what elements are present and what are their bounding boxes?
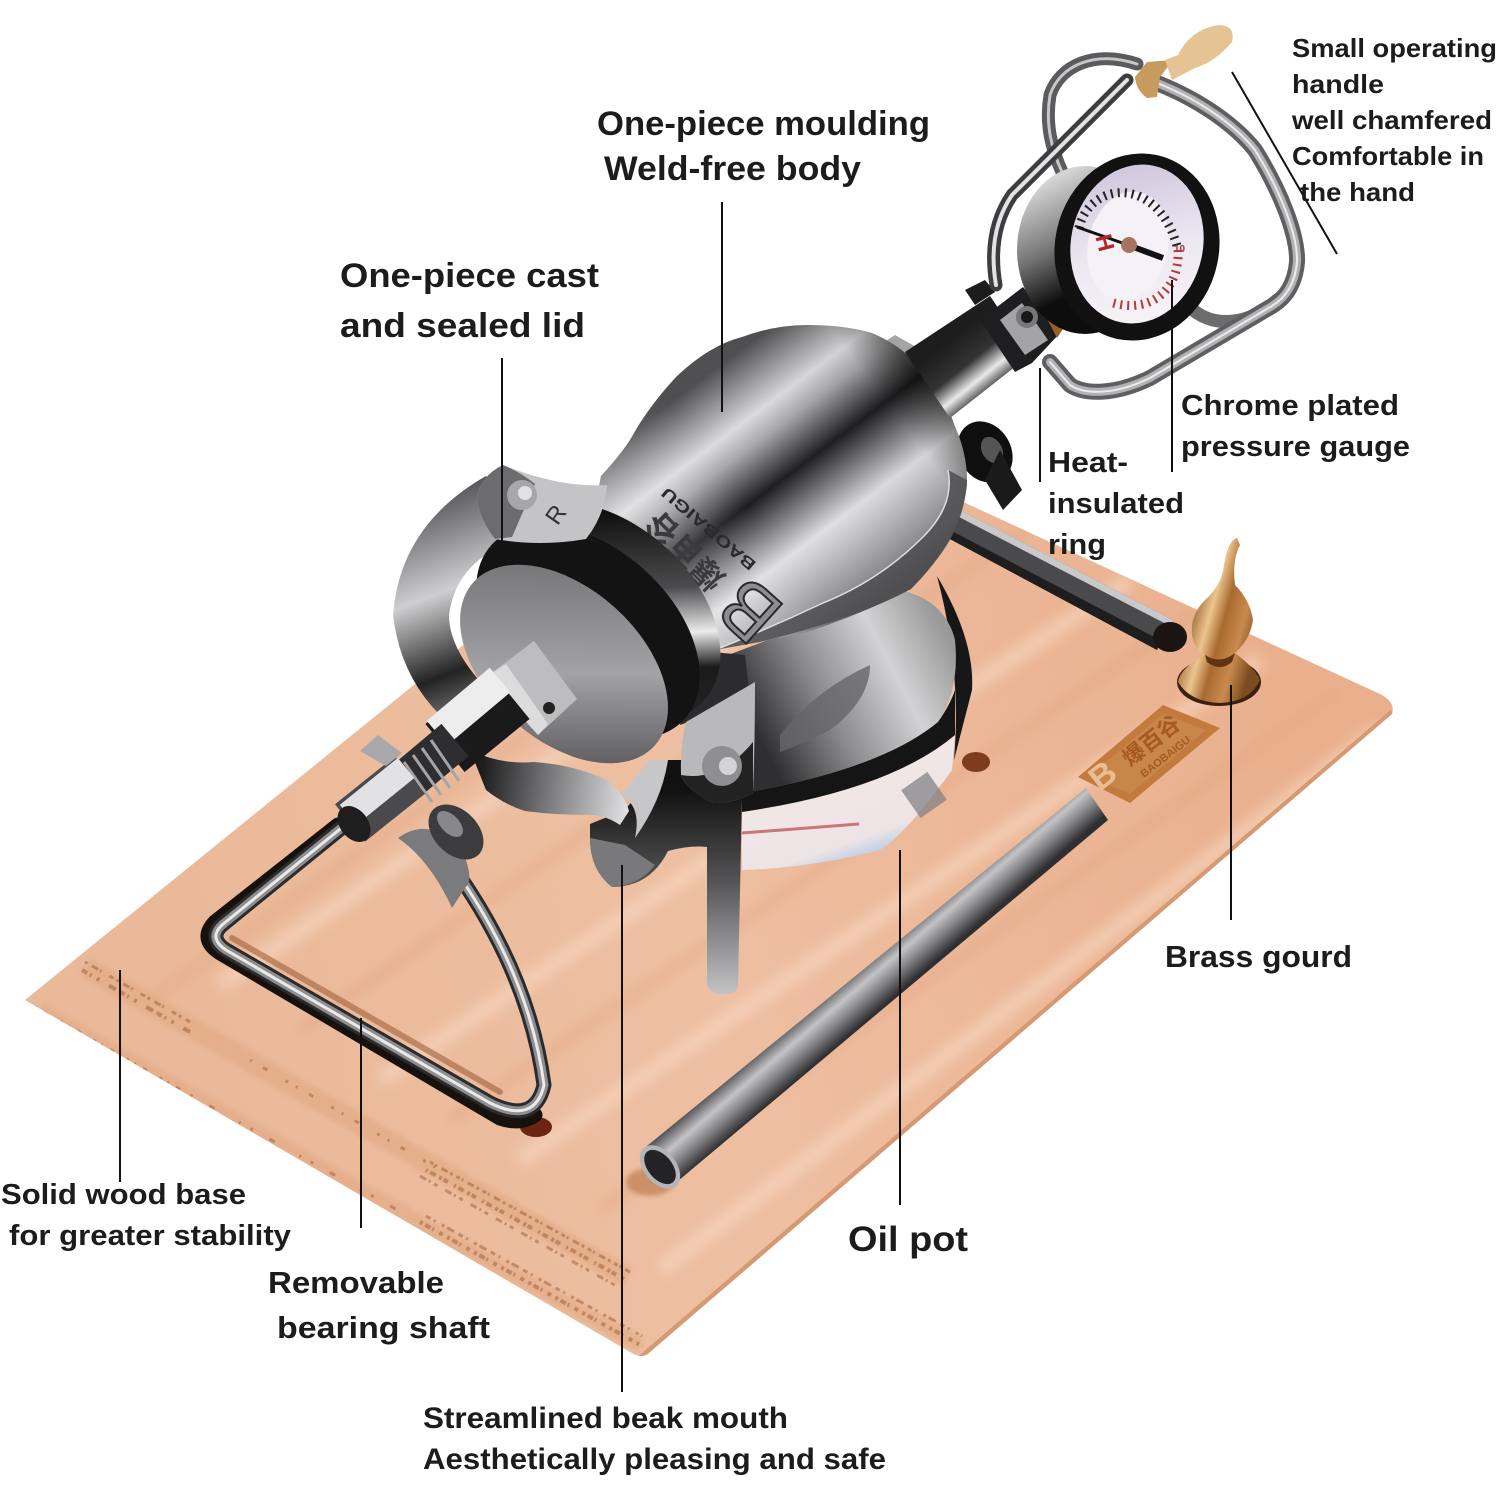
bearing boss <box>486 641 577 735</box>
label: cast lid <box>340 257 599 345</box>
gauge needle <box>1077 227 1163 258</box>
label: operating handle: the hand <box>1300 177 1415 207</box>
wooden base board <box>25 502 1393 1356</box>
label: removable bearing shaft: Removable <box>268 1265 444 1300</box>
icon: logo plate: 爆百谷 <box>1118 711 1185 771</box>
icon: oil pot <box>715 576 972 870</box>
icon: rear stand leg <box>946 411 1187 772</box>
icon: lower beak and leg <box>590 760 742 994</box>
embossed brand on body: B <box>701 561 798 661</box>
label: beak mouth: Streamlined beak mouth <box>423 1402 788 1435</box>
icon: C-shaped lid clamp <box>393 476 520 715</box>
label: heat-insulated ring <box>1048 447 1184 561</box>
label: heat-insulated ring: Heat- <box>1048 447 1128 479</box>
label: solid wood base: Solid wood base <box>1 1179 246 1211</box>
label: operating handle: Comfortable in <box>1292 141 1484 171</box>
icon: brass grip <box>1135 25 1233 98</box>
icon: lower lug with bolt <box>681 682 755 803</box>
label: one-piece moulding body: One-piece moulding <box>597 105 930 143</box>
icon: logo plate <box>1078 705 1220 803</box>
icon: neck and collar <box>905 278 1080 418</box>
label: solid wood base: for greater stability <box>9 1220 291 1252</box>
label: pressure gauge: pressure gauge <box>1181 431 1410 463</box>
embossed brand on body: BAOBAIGU <box>659 483 760 573</box>
label: removable bearing shaft: bearing shaft <box>277 1310 490 1345</box>
icon: pressure gauge <box>1017 138 1237 356</box>
embossed brand on body <box>639 483 798 661</box>
label: oil pot: Oil pot <box>848 1220 968 1259</box>
label: cast lid: One-piece cast <box>340 257 599 295</box>
icon: lower lip of lid clamp <box>470 750 629 825</box>
icon: upper lug with bolt: R <box>540 500 572 530</box>
label: operating handle: Small operating <box>1292 33 1497 63</box>
icon: pressure gauge: 10 <box>1174 244 1186 255</box>
icon: front wire stand <box>208 825 552 1137</box>
icon: main pear-shaped body <box>590 325 967 661</box>
label: one-piece moulding body: Weld-free body <box>604 150 861 188</box>
label: removable bearing shaft <box>268 1265 490 1345</box>
label: operating handle <box>1291 33 1497 207</box>
label: beak mouth <box>423 1402 886 1476</box>
embossed brand on body: 爆百谷 <box>639 504 732 598</box>
icon: lid rim <box>435 458 763 781</box>
label: operating handle: well chamfered <box>1291 105 1492 135</box>
label: solid wood base <box>1 1179 291 1252</box>
label: one-piece moulding body <box>597 105 930 188</box>
icon: steel tube <box>626 788 1108 1196</box>
icon: logo plate: BAOBAIGU <box>1138 734 1193 780</box>
label: pressure gauge: Chrome plated <box>1181 390 1399 422</box>
label: heat-insulated ring: ring <box>1048 529 1106 561</box>
label: heat-insulated ring: insulated <box>1048 488 1184 520</box>
moulded edge texture <box>35 712 1392 1358</box>
icon: operating handle <box>994 59 1297 392</box>
label: operating handle: handle <box>1292 69 1384 99</box>
icon: lid face <box>422 526 706 802</box>
label: beak mouth: Aesthetically pleasing and safe <box>423 1443 886 1476</box>
gauge brand mark: H <box>1090 231 1120 254</box>
icon: logo plate: B <box>1082 753 1124 798</box>
label: pressure gauge <box>1181 390 1410 463</box>
icon: screw shaft <box>331 641 577 908</box>
icon: brass gourd <box>1177 538 1261 706</box>
label: brass gourd: Brass gourd <box>1165 939 1352 974</box>
label: cast lid: and sealed lid <box>340 307 585 345</box>
leader lines <box>120 72 1337 1392</box>
icon: upper lug with bolt <box>477 465 607 543</box>
